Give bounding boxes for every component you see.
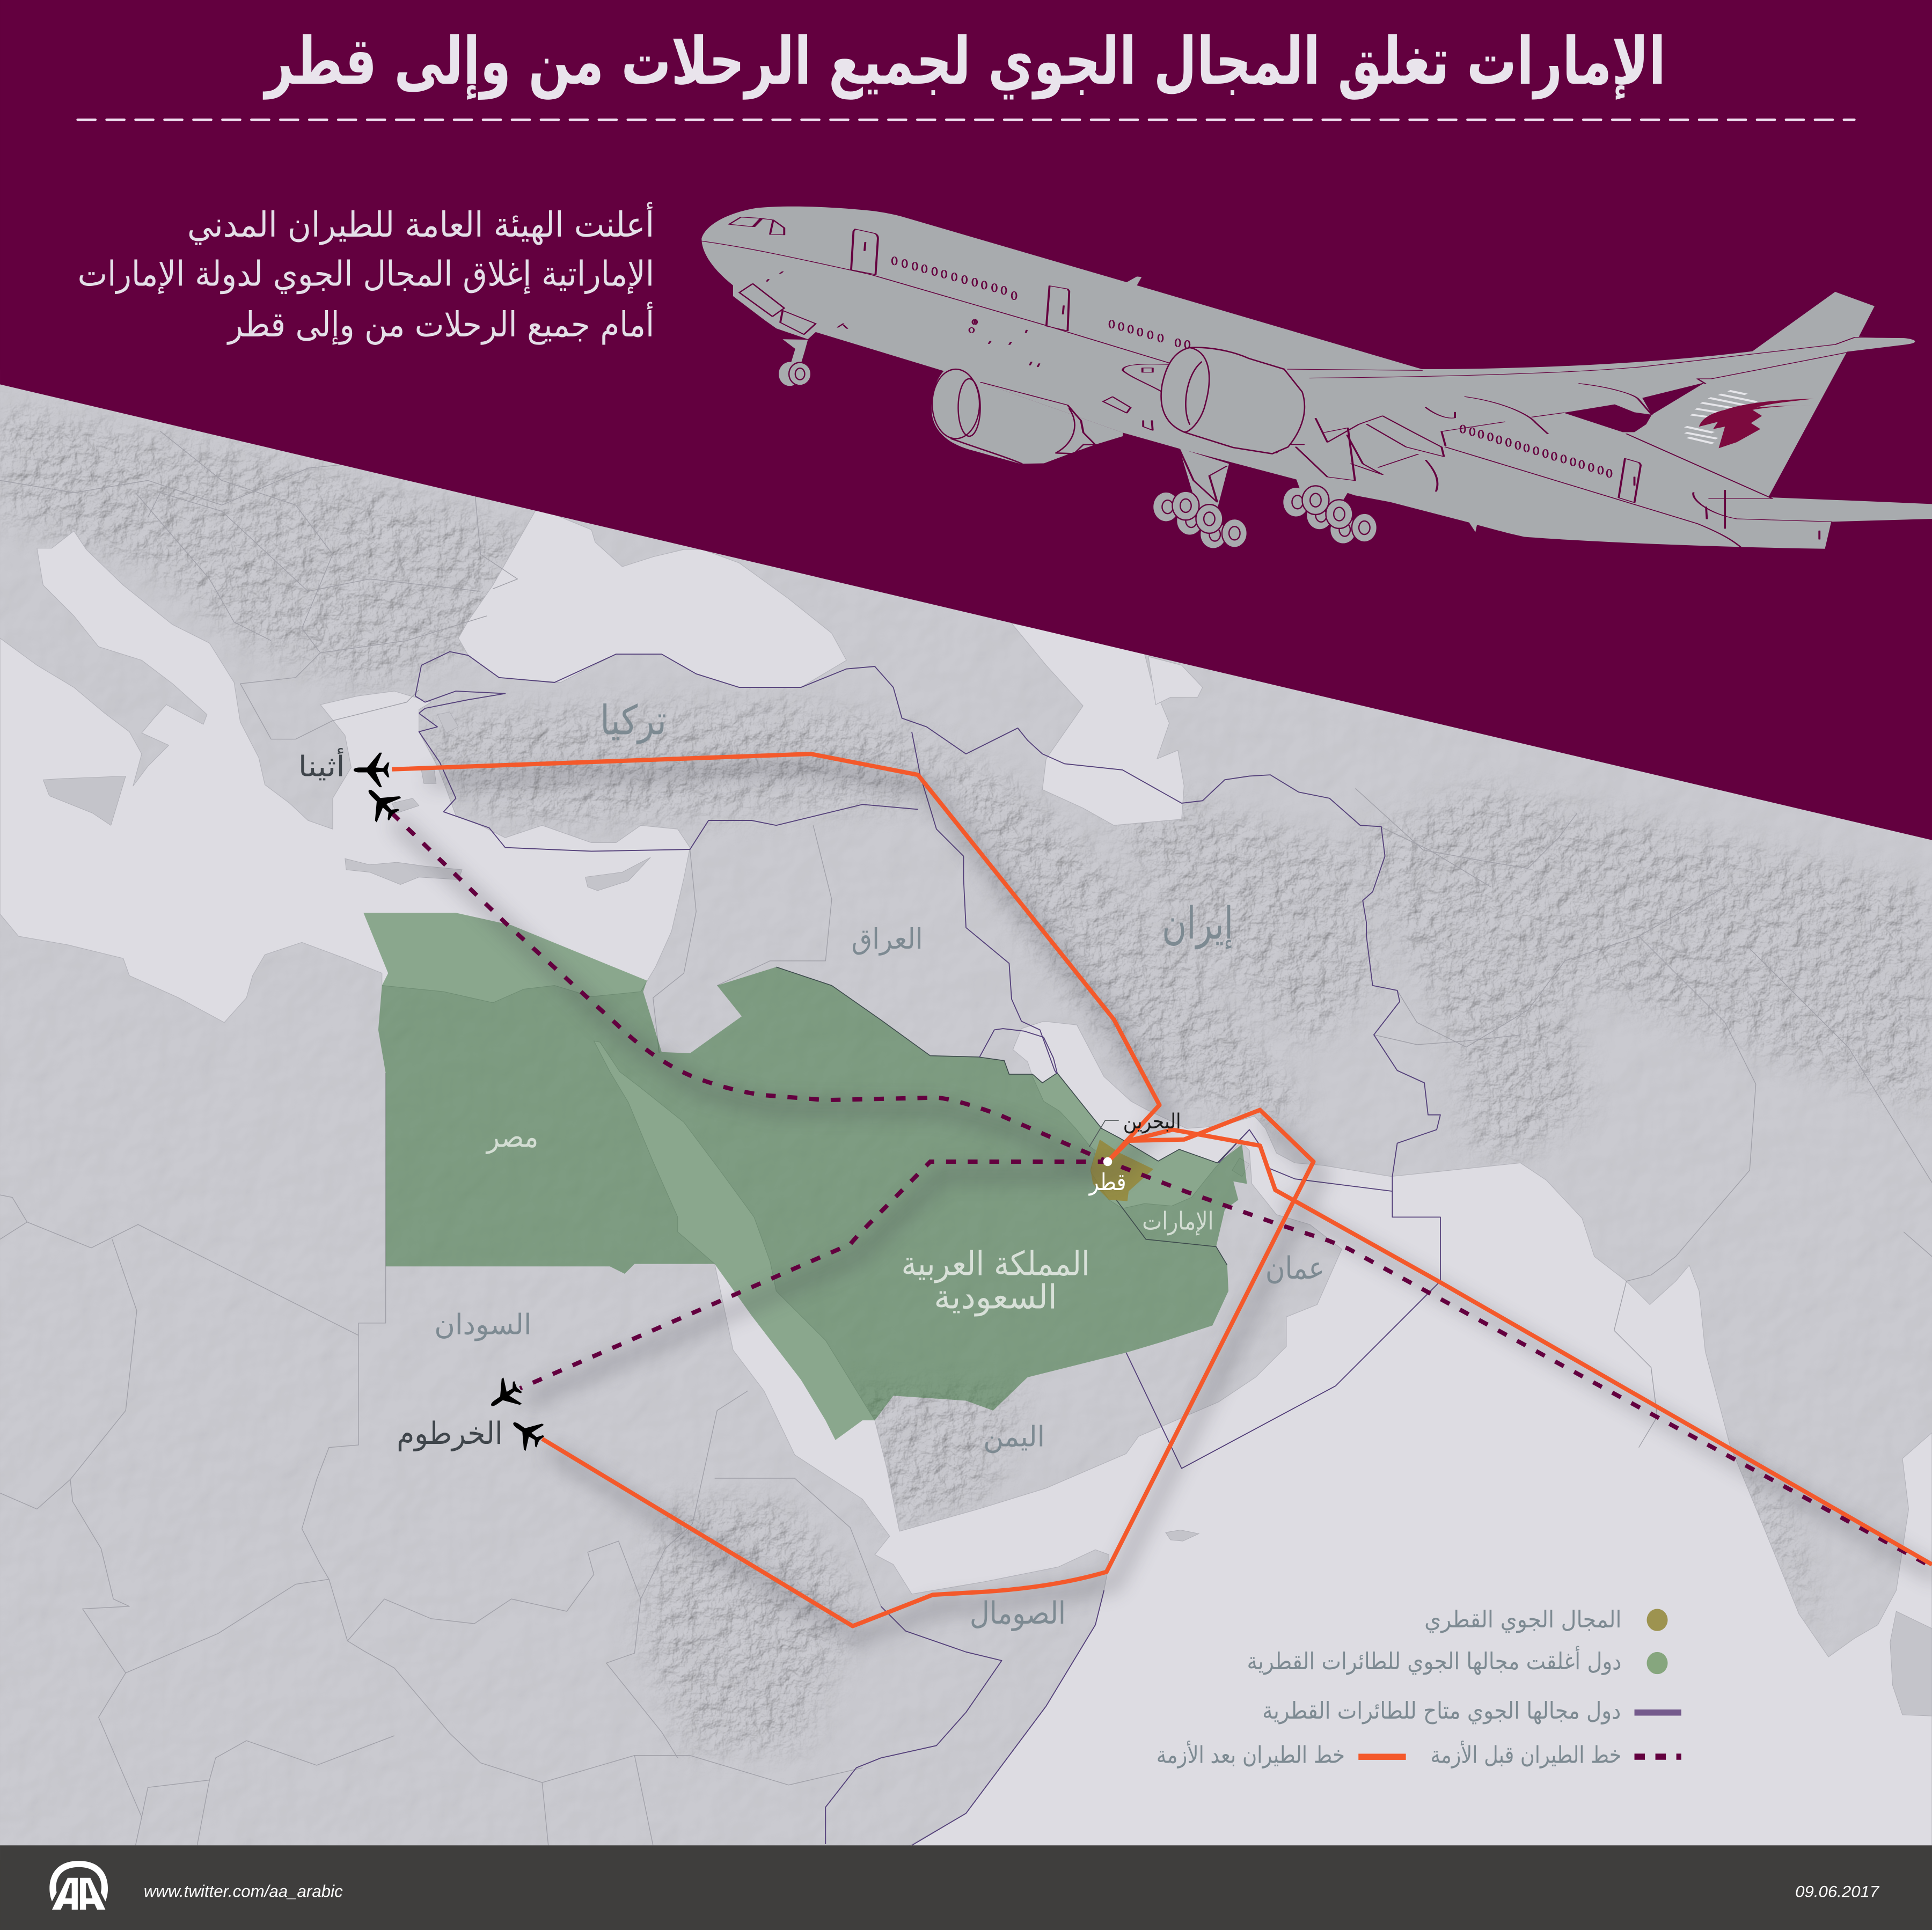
legend item: route before crisis: خط الطيران قبل الأزمة — [1431, 1740, 1621, 1768]
plane: tail logo stripes — [1686, 391, 1757, 443]
plane: fuselage panel lines — [701, 217, 1906, 547]
map: land base — [0, 370, 1932, 1860]
plane: main gear left bogie — [1153, 491, 1247, 548]
footer: AA logo — [49, 1861, 108, 1910]
label: Somalia: الصومال — [970, 1595, 1066, 1631]
label: Iraq: العراق — [851, 923, 923, 956]
map: mountain relief — [0, 407, 1932, 1749]
plane: nose gear — [779, 339, 811, 386]
intro text: أمام جميع الرحلات من وإلى قطر — [226, 302, 654, 345]
map: available airspace purple borders — [415, 652, 1440, 1845]
map: seas — [0, 508, 1932, 1848]
plane: tail logo oryx — [1699, 399, 1814, 448]
intro text — [78, 202, 654, 345]
legend — [1157, 1606, 1681, 1768]
map: Saudi border outlines — [776, 967, 1249, 1265]
label: Athens: أثينا — [298, 747, 345, 783]
intro text: الإماراتية إغلاق المجال الجوي لدولة الإمارات — [78, 254, 654, 295]
map: route shadows — [396, 766, 1932, 1639]
route: before the crisis, Khartoum (dashed) — [520, 1162, 1108, 1388]
map: Bahrain leader line — [1089, 1120, 1119, 1147]
footer: twitter url: www.twitter.com/aa_arabic — [144, 1882, 343, 1901]
label: Oman: عمان — [1265, 1250, 1324, 1286]
label: Iran: إيران — [1162, 898, 1233, 949]
label: UAE: الإمارات — [1142, 1206, 1213, 1235]
label: Yemen: اليمن — [983, 1420, 1045, 1453]
label: Turkey: تركيا — [600, 696, 667, 744]
route: before the crisis, Athens and onwards (dashed) — [392, 813, 1932, 1567]
label: Sudan: السودان — [434, 1308, 532, 1341]
icon: plane Khartoum 1 — [482, 1374, 528, 1419]
map: islands — [43, 712, 1932, 1716]
legend item: available airspace: دول مجالها الجوي متاح للطائرات القطرية — [1262, 1698, 1621, 1724]
label: Egypt: مصر — [485, 1119, 538, 1154]
label: Saudi Arabia: المملكة العربية — [901, 1244, 1090, 1283]
intro text: أعلنت الهيئة العامة للطيران المدني — [187, 202, 654, 245]
plane: wing gap — [1563, 383, 1706, 432]
footer bar — [0, 1845, 1932, 1930]
map: Qatar dot — [1103, 1157, 1112, 1166]
plane: main gear right bogie — [1283, 486, 1377, 544]
legend item: closed airspace: دول أغلقت مجالها الجوي للطائرات القطرية — [1247, 1646, 1621, 1675]
map labels — [298, 696, 1324, 1631]
route: after the crisis, east — [1129, 1129, 1932, 1565]
legend item: Qatar airspace: المجال الجوي القطري — [1424, 1606, 1621, 1633]
legend item: route after crisis: خط الطيران بعد الأزمة — [1157, 1740, 1345, 1768]
icon: plane Khartoum 2 — [504, 1410, 550, 1455]
map: terrain texture — [0, 370, 1932, 1860]
map: grey country borders — [0, 431, 1932, 1845]
map: Qatar airspace — [1091, 1140, 1153, 1201]
footer: date: 09.06.2017 — [1795, 1883, 1880, 1901]
map: closed airspace in green — [363, 913, 1247, 1440]
plane: far engine nacelle — [932, 369, 1123, 464]
plane: near engine — [1161, 348, 1305, 454]
plane: main gear struts — [1180, 448, 1355, 509]
route: after the crisis, Khartoum — [542, 1110, 1313, 1626]
header background — [0, 0, 1932, 840]
airliner illustration — [701, 207, 1932, 549]
label: Bahrain: البحرين — [1123, 1110, 1181, 1134]
icon: plane Athens 2 — [357, 778, 406, 827]
plane: doors — [851, 229, 1641, 503]
label: Qatar: قطر — [1088, 1169, 1126, 1196]
label: Saudi Arabia line 2: السعودية — [934, 1277, 1057, 1316]
plane: cabin windows — [892, 257, 1612, 478]
label: Khartoum: الخرطوم — [397, 1415, 503, 1451]
icon: plane Athens 1 — [354, 753, 390, 787]
plane: fuselage, wing and tail silhouette — [701, 207, 1932, 549]
plane: far engine inlet — [932, 369, 1094, 464]
route: after the crisis, Athens — [392, 754, 1159, 1162]
